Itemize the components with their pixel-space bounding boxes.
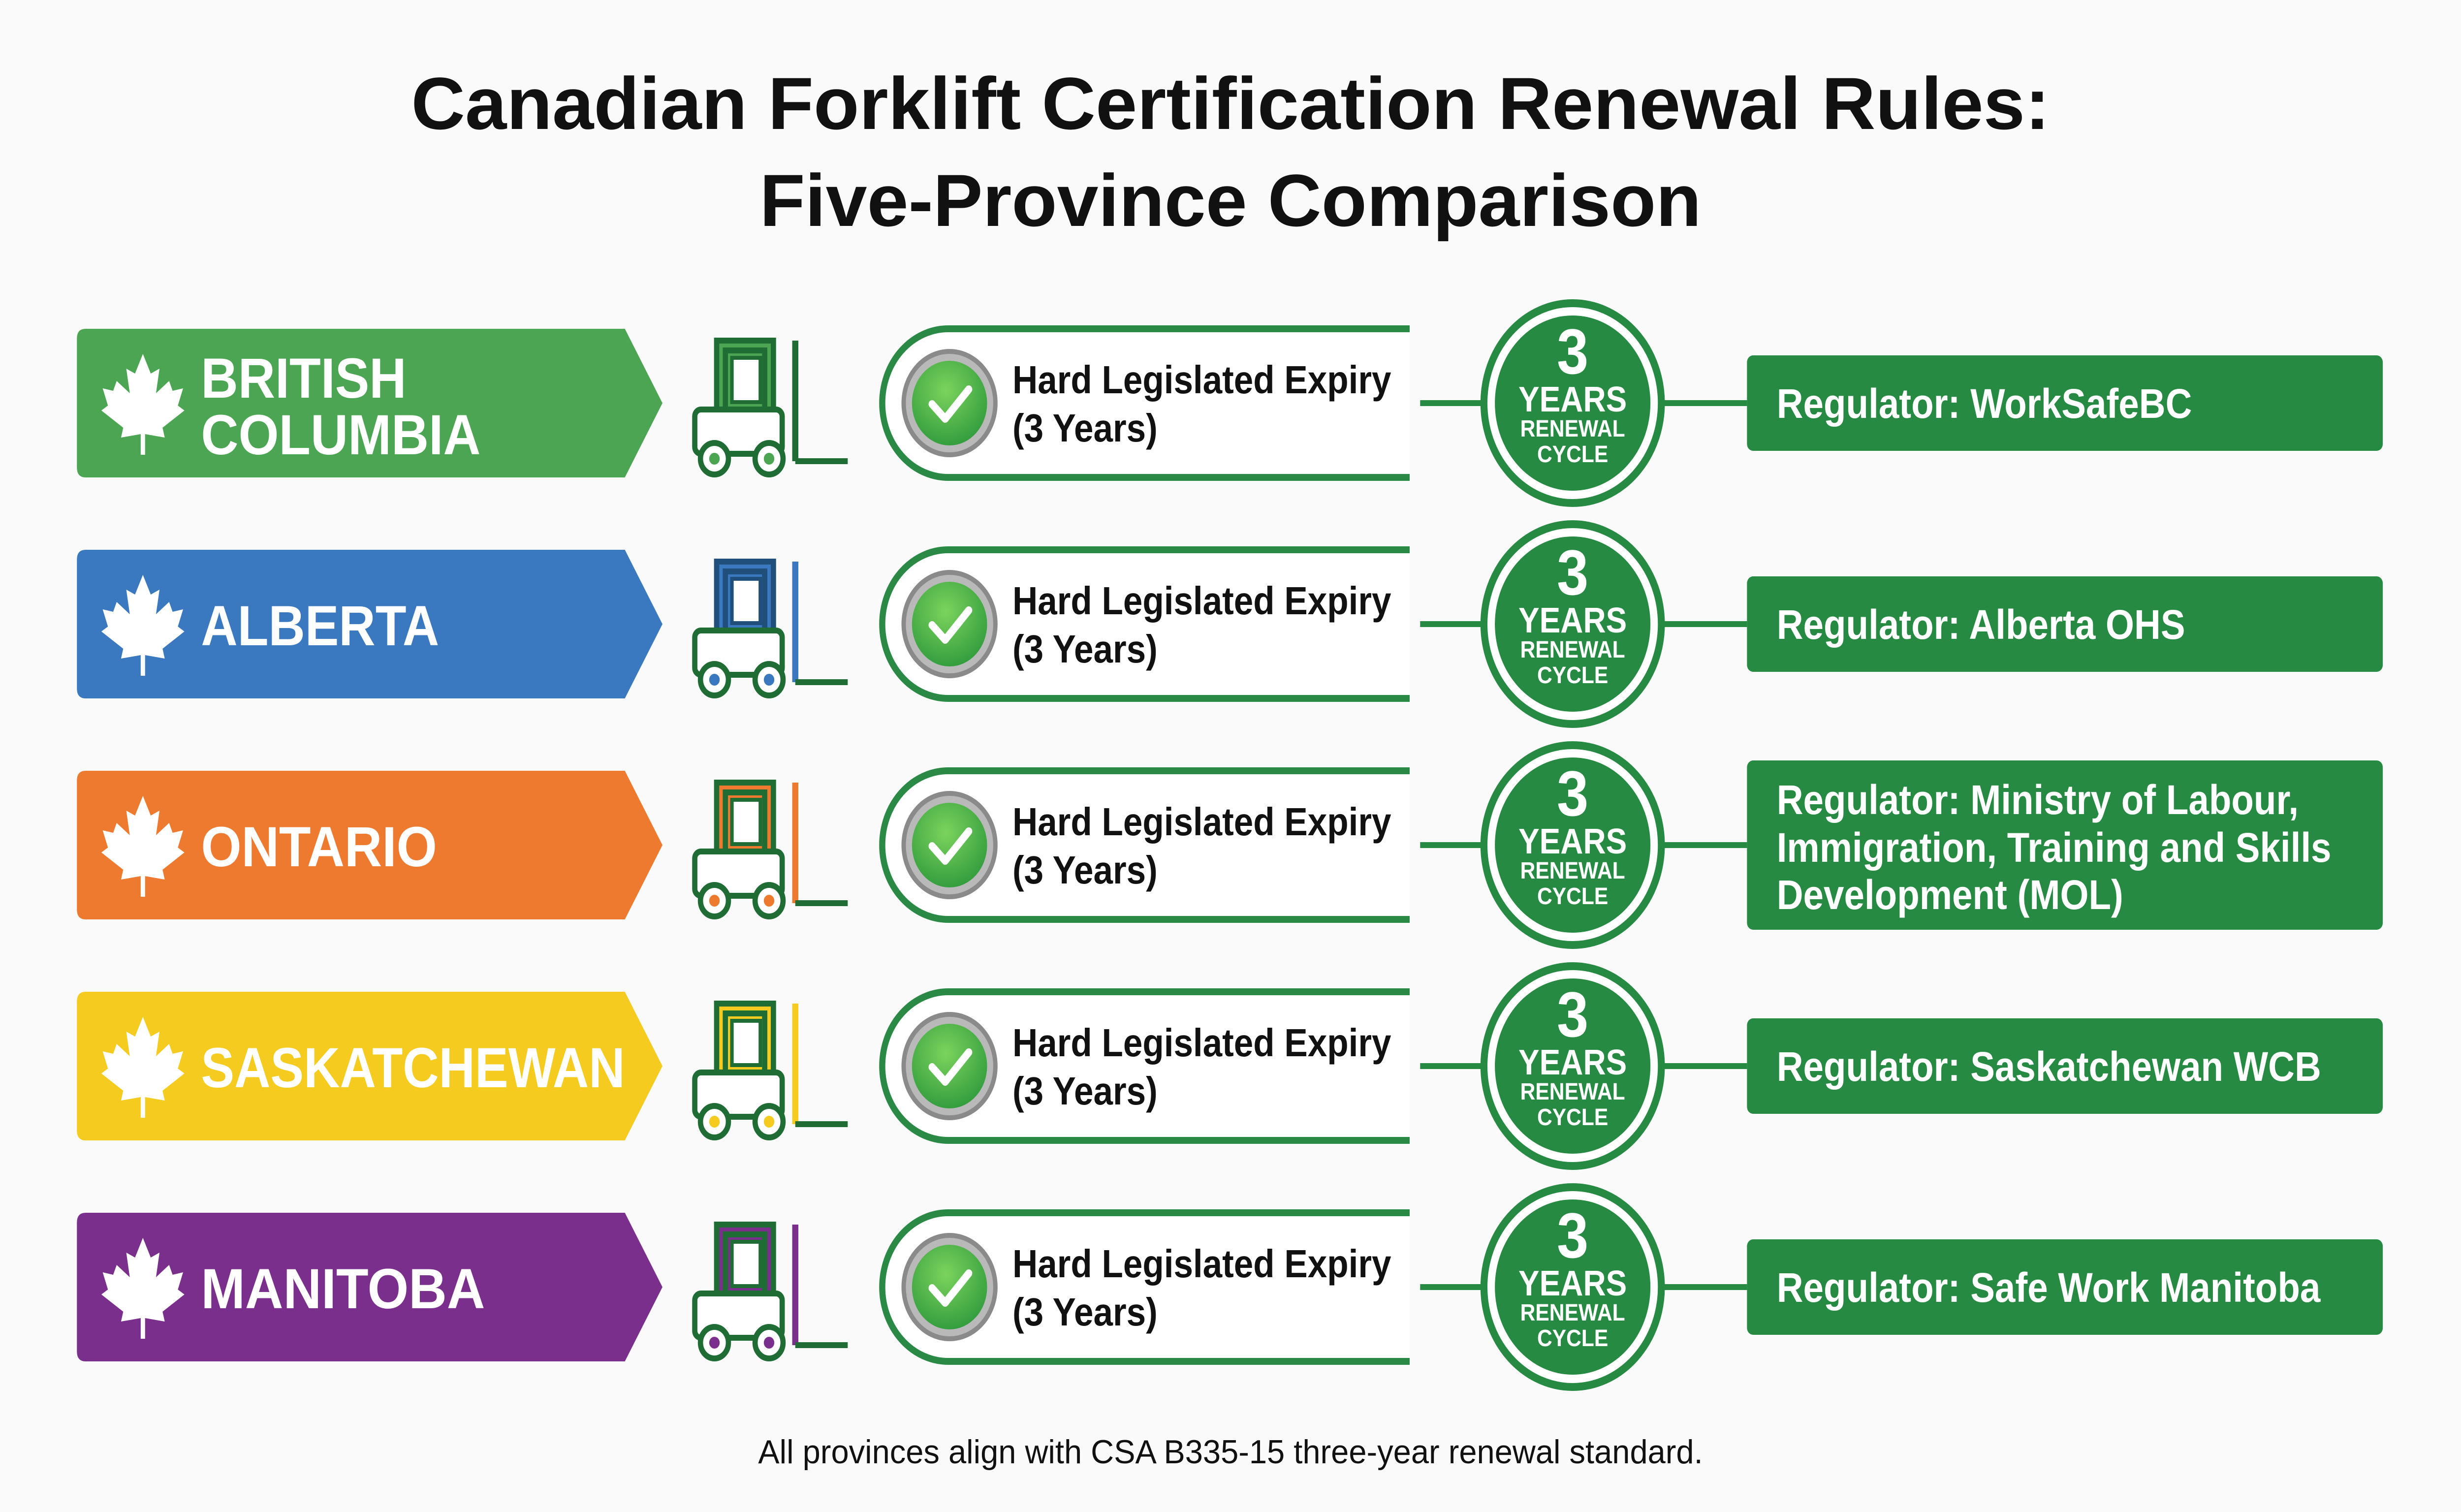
icon: forklift xyxy=(695,562,848,695)
status pill: hard legislated expiry xyxy=(882,329,1747,477)
icon: forklift xyxy=(695,341,848,474)
row: Manitoba xyxy=(77,1187,2383,1387)
title: Canadian Forklift Certification Renewal Rules: xyxy=(411,63,2050,145)
badge: 3 years renewal cycle xyxy=(1484,1187,1661,1387)
province banner: Ontario: ONTARIO xyxy=(201,816,437,879)
row: Saskatchewan xyxy=(77,966,2383,1166)
province banner: British Columbia xyxy=(77,329,663,477)
regulator box: Ministry of Labour xyxy=(1747,760,2383,930)
icon: forklift xyxy=(695,1225,848,1358)
row: British Columbia xyxy=(77,303,2383,503)
province banner: Ontario xyxy=(77,771,663,919)
regulator box: Ministry of Labour: Regulator: Ministry of Labour, xyxy=(1777,777,2299,823)
regulator box: Safe Work Manitoba: Regulator: Safe Work Manitoba xyxy=(1777,1264,2321,1311)
footer note: All provinces align with CSA B335-15 three-year renewal standard. xyxy=(758,1433,1703,1471)
badge: 3 years renewal cycle xyxy=(1484,303,1661,503)
regulator box: Ministry of Labour: Immigration, Training and Skills xyxy=(1777,824,2332,871)
regulator box: Ministry of Labour: Development (MOL) xyxy=(1777,872,2123,918)
province banner: Saskatchewan: SASKATCHEWAN xyxy=(201,1037,625,1100)
province banner: Alberta xyxy=(77,550,663,698)
province banner: Manitoba xyxy=(77,1213,663,1361)
icon: forklift xyxy=(695,783,848,916)
province banner: Alberta: ALBERTA xyxy=(201,595,439,658)
status pill: hard legislated expiry xyxy=(882,1213,1747,1361)
title: Five-Province Comparison xyxy=(759,160,1702,242)
badge: 3 years renewal cycle xyxy=(1484,524,1661,724)
regulator box: Saskatchewan WCB: Regulator: Saskatchewan WCB xyxy=(1777,1043,2321,1090)
province banner: British Columbia: BRITISH xyxy=(201,347,407,410)
status pill: hard legislated expiry xyxy=(882,550,1747,698)
regulator box: Saskatchewan WCB xyxy=(1747,1018,2383,1114)
regulator box: Safe Work Manitoba xyxy=(1747,1239,2383,1335)
icon: forklift xyxy=(695,1004,848,1137)
regulator box: WorkSafeBC xyxy=(1747,355,2383,451)
regulator box: WorkSafeBC: Regulator: WorkSafeBC xyxy=(1777,380,2192,427)
province banner: Manitoba: MANITOBA xyxy=(201,1258,485,1321)
regulator box: Alberta OHS: Regulator: Alberta OHS xyxy=(1777,601,2185,648)
status pill: hard legislated expiry xyxy=(882,992,1747,1140)
status pill: hard legislated expiry xyxy=(882,771,1747,919)
regulator box: Alberta OHS xyxy=(1747,576,2383,672)
badge: 3 years renewal cycle xyxy=(1484,966,1661,1166)
row: Alberta xyxy=(77,524,2383,724)
row: Ontario xyxy=(77,745,2383,945)
province banner: Saskatchewan xyxy=(77,992,663,1140)
badge: 3 years renewal cycle xyxy=(1484,745,1661,945)
province banner: British Columbia: COLUMBIA xyxy=(201,404,481,467)
title xyxy=(411,63,2050,242)
